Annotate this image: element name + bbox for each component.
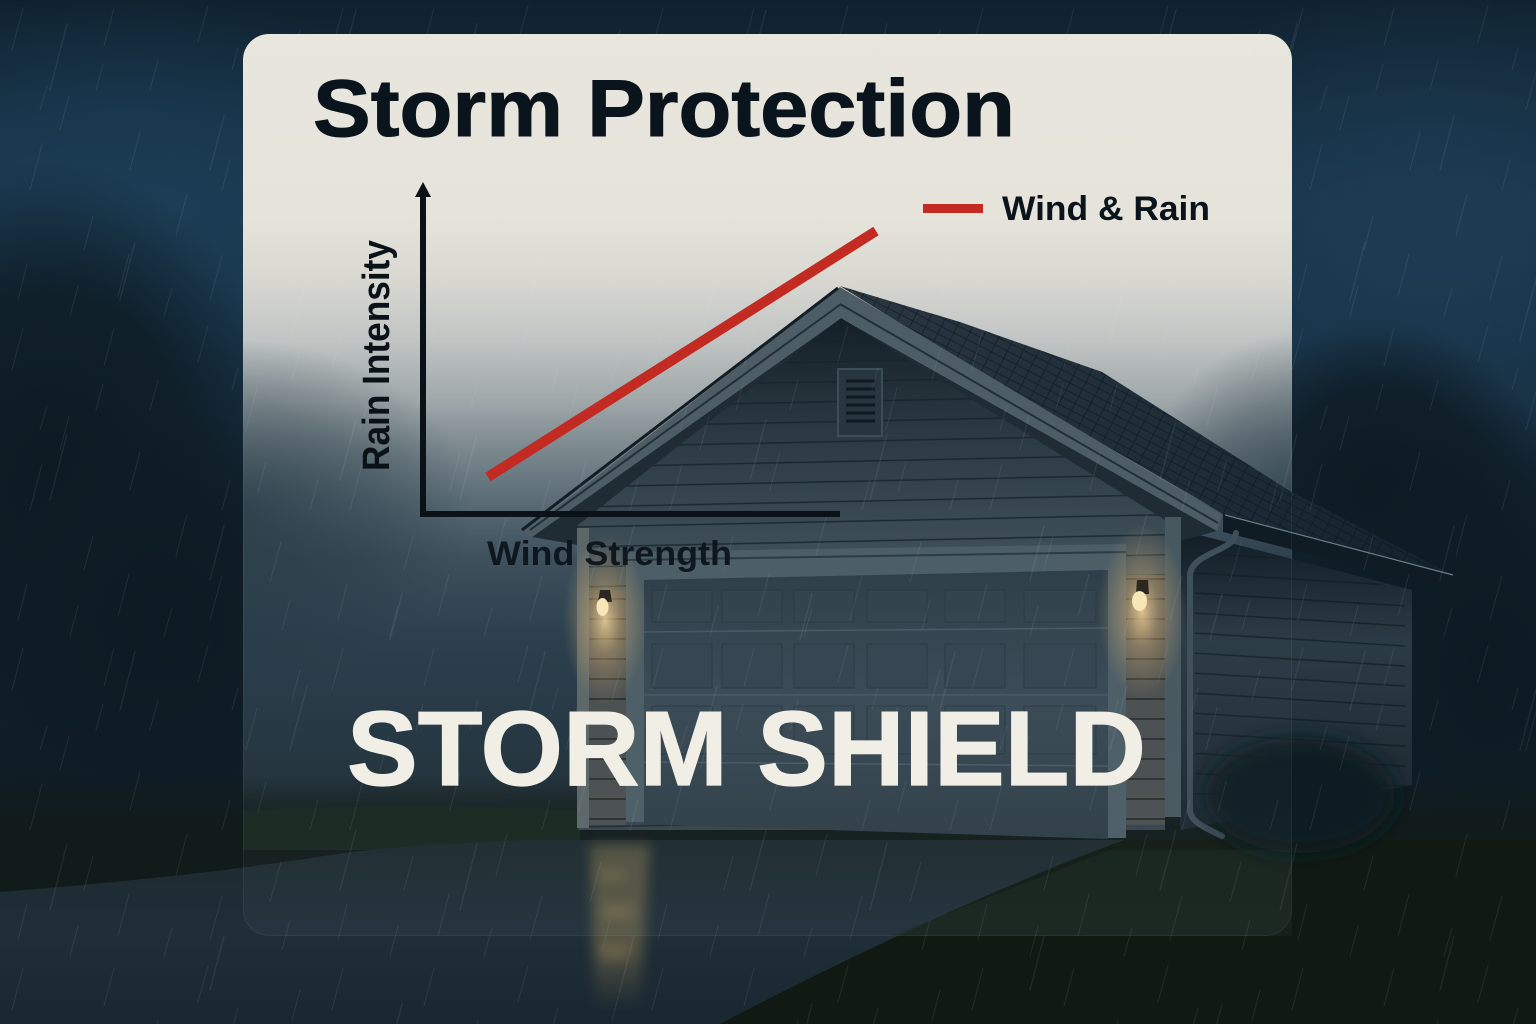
lamp right [1132, 580, 1149, 611]
roof eave shadow [1223, 514, 1453, 584]
y axis label: Rain Intensity [356, 240, 398, 471]
wall side trim [1165, 517, 1181, 817]
garage door [644, 570, 1108, 839]
legend: Wind & Rain [1002, 190, 1210, 228]
panel tint over scene [243, 34, 1292, 936]
y axis with arrow [415, 182, 431, 517]
lamp glow right [1098, 524, 1186, 700]
bush [1205, 737, 1395, 853]
gable fascia trim [524, 287, 1222, 537]
legend [923, 190, 1210, 228]
headline: storm shield: STORM SHIELD [347, 690, 1146, 808]
left and right wall pieces with siding near lamps [589, 590, 626, 825]
ground: lawn and wet driveway [0, 775, 1536, 1024]
roof [840, 286, 1453, 575]
title: Storm Protection [313, 64, 1015, 154]
red trend line [488, 231, 876, 477]
driveway lamp reflection [590, 845, 650, 1005]
downspout [1190, 533, 1236, 836]
gable wall [578, 318, 1165, 830]
lamp left [596, 590, 612, 616]
garage: house with roof, door and lamps [522, 286, 1453, 853]
panel: translucent fog card [243, 34, 1292, 803]
background: stormy sky and tree line [0, 22, 1536, 792]
side wall [1180, 530, 1412, 830]
x axis label: Wind Strength [487, 535, 732, 573]
line chart [356, 182, 1210, 573]
garage door frame [626, 544, 1126, 838]
x axis [420, 511, 840, 517]
lamp glow left [563, 535, 647, 705]
gable underlay [532, 318, 1217, 545]
attic vent [838, 369, 882, 436]
